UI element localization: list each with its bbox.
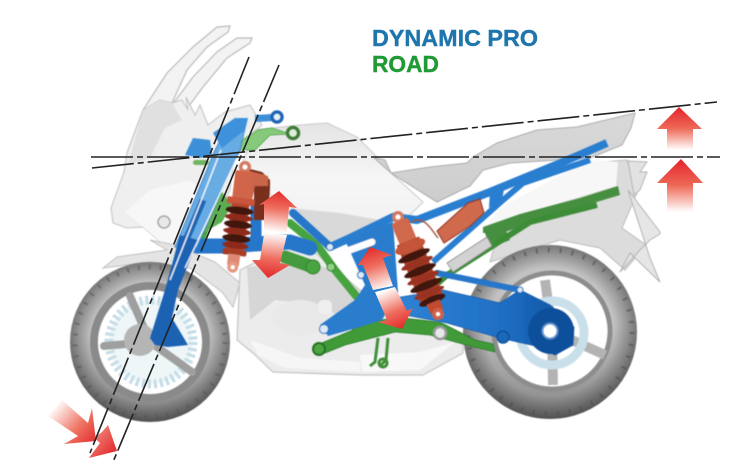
fork axis road — [90, 57, 249, 453]
green road-mode frame — [193, 128, 620, 367]
motorcycle body — [103, 26, 660, 375]
green rear subframe — [483, 186, 620, 248]
blue centre bracket — [320, 222, 398, 336]
front fork lower — [150, 235, 198, 347]
pannier light strip — [485, 160, 618, 228]
front shock absorber — [218, 159, 270, 274]
front fork upper — [175, 120, 247, 247]
front fairing — [111, 97, 262, 250]
front shock reservoir — [246, 168, 270, 220]
engine — [237, 240, 463, 375]
rear brake disc — [520, 301, 584, 365]
rear drive hub — [528, 308, 574, 354]
geometry reference lines — [90, 57, 720, 462]
swingarm pivot — [497, 331, 509, 343]
blue left clamp — [185, 138, 212, 158]
rear arrow down — [375, 287, 413, 329]
front tire shade — [70, 262, 230, 422]
front wheel — [70, 262, 230, 422]
lower right lift arrow — [657, 159, 703, 212]
swingarm shock mount — [434, 327, 446, 339]
front spokes — [104, 296, 192, 372]
bracket opening — [350, 242, 372, 250]
blue handlebar link — [255, 114, 275, 122]
rear fender stay — [620, 190, 660, 282]
green subframe lower rail — [428, 205, 597, 292]
green small lever — [193, 160, 209, 165]
front tread — [75, 267, 225, 417]
rear rim — [494, 273, 610, 389]
blue rear subframe tubes — [330, 143, 607, 262]
grey mechanism — [447, 237, 492, 272]
BMW roundel — [158, 216, 170, 228]
raised rake reference line — [92, 102, 717, 168]
fuel tank — [240, 123, 423, 245]
upper right lift arrow — [657, 107, 702, 150]
front rim — [94, 286, 206, 398]
green upper eye — [288, 128, 298, 138]
rear arrow up — [358, 247, 393, 290]
rear spokes — [545, 280, 605, 385]
bottom-left dive arrows — [48, 400, 117, 458]
rear axle — [542, 324, 558, 338]
blue main frame — [197, 205, 520, 290]
rear shock reservoir — [437, 199, 484, 243]
fairing highlight panel — [125, 180, 205, 250]
frame pivots — [320, 244, 523, 334]
front tire — [70, 262, 230, 422]
blue subframe gusset — [489, 184, 505, 208]
dive arrow shaft and head — [48, 400, 96, 444]
rear travel double arrow — [358, 247, 413, 329]
green pivot — [313, 343, 325, 355]
engine details — [247, 262, 455, 372]
front brake disc — [109, 300, 193, 384]
rear tire — [463, 245, 637, 419]
legend: dynamic pro: DYNAMIC PRO — [372, 25, 538, 51]
seat and tail — [373, 113, 635, 202]
blue dynamic-mode frame — [150, 112, 607, 355]
front arrow down — [252, 234, 290, 278]
blue swingarm — [395, 290, 574, 355]
rear shock assembly — [380, 205, 456, 326]
tank lower panel — [290, 208, 380, 245]
tail light fins — [628, 161, 647, 195]
windscreen — [127, 26, 252, 153]
front hub — [124, 324, 156, 356]
legend: road: ROAD — [372, 51, 439, 77]
front shock assembly — [218, 159, 260, 274]
green lower swingarm — [317, 318, 495, 353]
dive arrow second head — [89, 425, 117, 458]
front fender — [103, 240, 240, 307]
fork dark strip — [186, 200, 203, 240]
legend — [372, 25, 538, 77]
rear shock absorber — [380, 199, 484, 339]
white fork stripes — [170, 150, 237, 280]
rear tread — [468, 250, 632, 414]
green upper link — [198, 205, 357, 297]
horizontal reference line — [91, 156, 720, 158]
green knobs — [306, 260, 335, 274]
front travel double arrow — [252, 191, 297, 278]
rear wheel — [463, 245, 637, 419]
fairing shading — [128, 100, 182, 165]
green steering linkage — [235, 128, 290, 150]
green fork link — [200, 192, 232, 232]
front shock top mount — [240, 170, 268, 200]
rear tire shade — [463, 245, 637, 419]
front arrow up — [259, 191, 297, 232]
green stand — [370, 338, 388, 367]
blue handlebar eye — [272, 112, 282, 122]
fork axis dynamic — [113, 65, 279, 462]
reservoir hose — [412, 220, 438, 238]
blue steering head — [213, 118, 248, 148]
rear pannier — [490, 160, 646, 270]
